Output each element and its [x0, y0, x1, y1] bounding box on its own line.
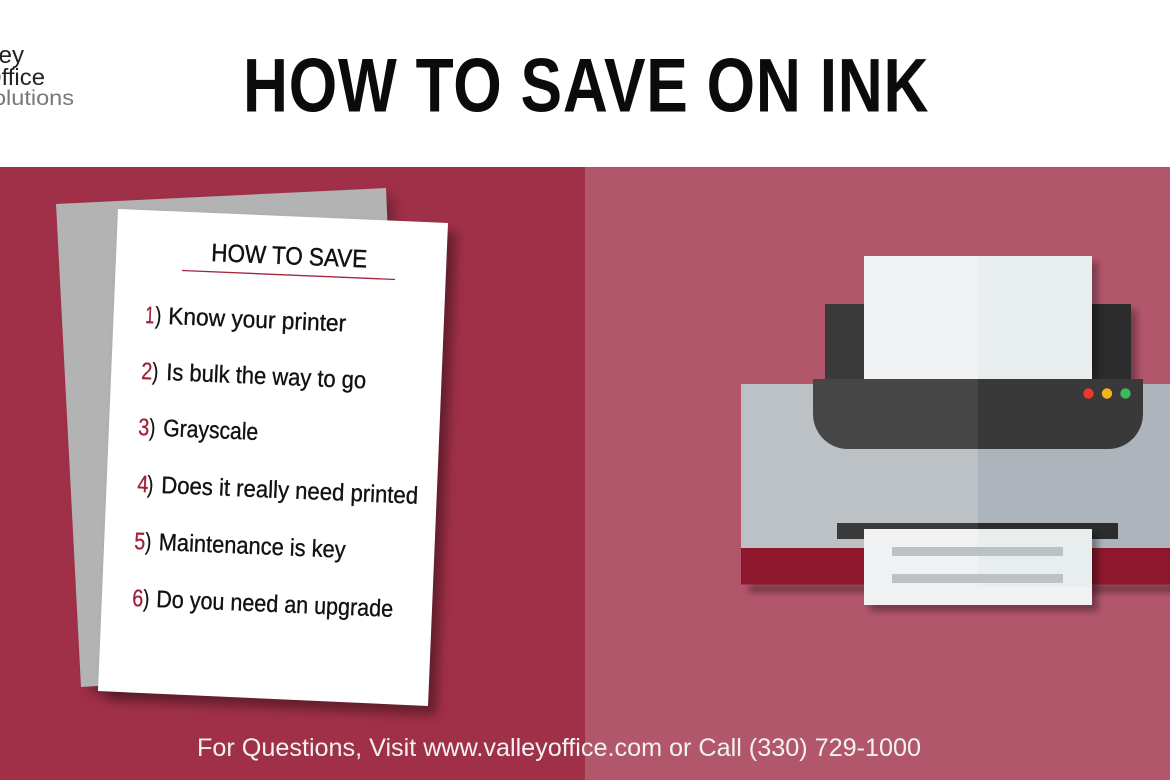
output paper [864, 529, 1098, 611]
item 4: Does it really need printed [161, 472, 419, 510]
item 5: 5 [134, 528, 146, 555]
item 2: Is bulk the way to go [166, 359, 367, 394]
item 6: 6 [132, 585, 144, 612]
checklist heading: HOW TO SAVE [211, 239, 368, 274]
output slot [837, 523, 1118, 539]
printer body shadow [749, 585, 1170, 592]
icon: printer [741, 256, 1170, 611]
item 1: ) [155, 303, 162, 330]
heading underline [182, 270, 395, 280]
item 4: ) [147, 472, 154, 499]
back sheet of paper [56, 188, 414, 695]
rear paper tray [825, 304, 1137, 385]
item 3: 3 [138, 414, 150, 441]
item 1: Know your printer [168, 303, 347, 337]
checklist sheet [98, 209, 456, 715]
item 4: 4 [137, 471, 149, 498]
input paper [864, 256, 1098, 380]
printer body [741, 384, 1170, 584]
footer contact line: For Questions, Visit www.valleyoffice.com or Call (330) 729-1000 [197, 734, 921, 762]
control head [813, 379, 1143, 449]
item 3 [138, 414, 259, 446]
item 1: 1 [145, 302, 155, 329]
logo [0, 42, 74, 110]
item 3: ) [149, 415, 156, 442]
panel: right background [585, 167, 1170, 780]
title: HOW TO SAVE ON INK [243, 43, 929, 128]
item 5: ) [145, 529, 152, 556]
item 3: Grayscale [163, 415, 259, 446]
item 6: Do you need an upgrade [156, 586, 394, 623]
status lights [1083, 388, 1131, 399]
item 5: Maintenance is key [158, 529, 346, 564]
item 2: ) [152, 359, 159, 386]
panel: left background [0, 167, 585, 780]
item 2: 2 [141, 358, 153, 385]
item 6: ) [143, 586, 150, 613]
